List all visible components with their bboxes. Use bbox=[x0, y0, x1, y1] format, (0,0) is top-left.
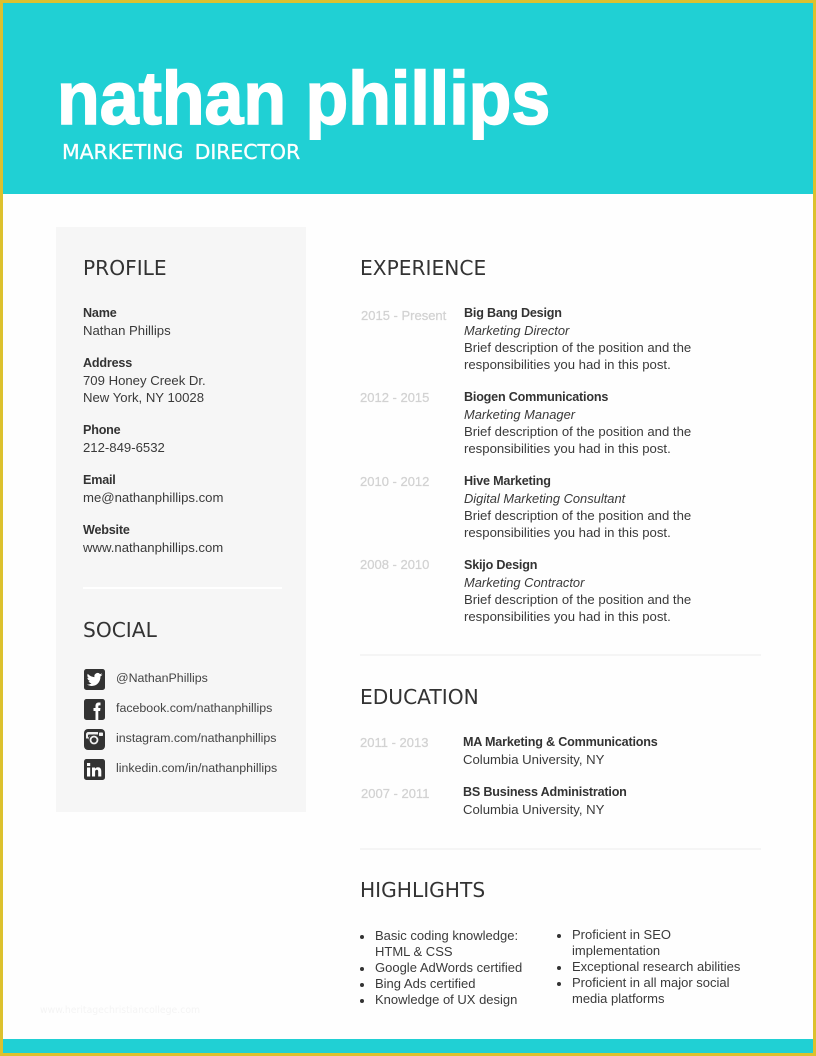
heading: social: SOCIAL bbox=[83, 618, 157, 642]
list: highlights column one: HTML & CSS bbox=[375, 944, 453, 959]
icon: linkedin bbox=[84, 759, 105, 780]
icon: instagram bbox=[84, 729, 105, 750]
profile: address: Address bbox=[83, 356, 132, 370]
panel: profile sidebar bbox=[56, 227, 306, 812]
degree: ma marketing: Columbia University, NY bbox=[463, 752, 604, 767]
date: 2012 - 2015: 2012 - 2015 bbox=[360, 390, 429, 405]
profile: phone bbox=[83, 423, 165, 455]
profile: name: Name bbox=[83, 306, 117, 320]
job: hive marketing: Brief description of the position and the bbox=[464, 508, 691, 523]
list: highlights column one bbox=[360, 928, 522, 1007]
list: highlights column two: media platforms bbox=[572, 991, 664, 1006]
profile: website: Website bbox=[83, 523, 130, 537]
list: highlights column two: Exceptional research abilities bbox=[572, 959, 740, 974]
heading: education: EDUCATION bbox=[360, 685, 479, 709]
profile: phone: 212-849-6532 bbox=[83, 440, 165, 455]
job: skijo design: responsibilities you had in this post. bbox=[464, 609, 671, 624]
list: highlights column one: Bing Ads certified bbox=[375, 976, 475, 991]
job: hive marketing: Digital Marketing Consultant bbox=[464, 491, 625, 506]
profile: address bbox=[83, 356, 206, 405]
text: facebook url: facebook.com/nathanphillips bbox=[116, 701, 272, 715]
job: big bang design: responsibilities you had in this post. bbox=[464, 357, 671, 372]
text: instagram url: instagram.com/nathanphillips bbox=[116, 731, 276, 745]
icon: facebook bbox=[84, 699, 105, 720]
profile: email: me@nathanphillips.com bbox=[83, 490, 223, 505]
name title: nathan phillips bbox=[57, 56, 550, 140]
header band bbox=[0, 0, 816, 194]
job: big bang design: Brief description of the position and the bbox=[464, 340, 691, 355]
profile: address: New York, NY 10028 bbox=[83, 390, 204, 405]
job: hive marketing: Hive Marketing bbox=[464, 474, 551, 488]
degree: bs business: BS Business Administration bbox=[463, 785, 627, 799]
list: highlights column two bbox=[557, 927, 740, 1006]
job: big bang design bbox=[464, 306, 691, 372]
profile: website: www.nathanphillips.com bbox=[83, 540, 223, 555]
list: highlights column two: implementation bbox=[572, 943, 660, 958]
job: hive marketing: responsibilities you had in this post. bbox=[464, 525, 671, 540]
profile: email bbox=[83, 473, 223, 505]
job: biogen communications: Biogen Communications bbox=[464, 390, 608, 404]
date: 2010 - 2012: 2010 - 2012 bbox=[360, 474, 429, 489]
watermark: www.heritagechristiancollege.com bbox=[40, 1005, 200, 1016]
job: skijo design: Marketing Contractor bbox=[464, 575, 584, 590]
text: twitter handle: @NathanPhillips bbox=[116, 671, 208, 685]
degree: ma marketing bbox=[463, 735, 658, 767]
date: 2015 - present: 2015 - Present bbox=[361, 308, 446, 323]
job: biogen communications bbox=[464, 390, 691, 456]
date: 2008 - 2010: 2008 - 2010 bbox=[360, 557, 429, 572]
job: skijo design: Brief description of the position and the bbox=[464, 592, 691, 607]
list: highlights column two: Proficient in SEO bbox=[572, 927, 671, 942]
profile: phone: Phone bbox=[83, 423, 120, 437]
job: biogen communications: Brief description of the position and the bbox=[464, 424, 691, 439]
degree: bs business bbox=[463, 785, 627, 817]
job subtitle: MARKETING DIRECTOR bbox=[62, 140, 300, 164]
footer band bbox=[0, 1039, 816, 1056]
list: highlights column one: Google AdWords certified bbox=[375, 960, 522, 975]
profile: email: Email bbox=[83, 473, 116, 487]
profile: address: 709 Honey Creek Dr. bbox=[83, 373, 206, 388]
date: 2007 - 2011: 2007 - 2011 bbox=[361, 786, 429, 801]
date: 2011 - 2013: 2011 - 2013 bbox=[360, 735, 428, 750]
heading: highlights: HIGHLIGHTS bbox=[360, 878, 485, 902]
job: skijo design bbox=[464, 558, 691, 624]
heading: profile: PROFILE bbox=[83, 256, 167, 280]
profile: name bbox=[83, 306, 171, 338]
job: biogen communications: Marketing Manager bbox=[464, 407, 575, 422]
job: hive marketing bbox=[464, 474, 691, 540]
job: big bang design: Big Bang Design bbox=[464, 306, 562, 320]
profile: website bbox=[83, 523, 223, 555]
job: skijo design: Skijo Design bbox=[464, 558, 537, 572]
profile: name: Nathan Phillips bbox=[83, 323, 171, 338]
heading: experience: EXPERIENCE bbox=[360, 256, 486, 280]
text: linkedin url: linkedin.com/in/nathanphillips bbox=[116, 761, 277, 775]
icon: twitter bbox=[84, 669, 105, 690]
degree: bs business: Columbia University, NY bbox=[463, 802, 604, 817]
degree: ma marketing: MA Marketing & Communications bbox=[463, 735, 658, 749]
list: highlights column two: Proficient in all major social bbox=[572, 975, 730, 990]
job: biogen communications: responsibilities you had in this post. bbox=[464, 441, 671, 456]
job: big bang design: Marketing Director bbox=[464, 323, 569, 338]
list: highlights column one: Basic coding knowledge: bbox=[375, 928, 518, 943]
list: highlights column one: Knowledge of UX design bbox=[375, 992, 517, 1007]
